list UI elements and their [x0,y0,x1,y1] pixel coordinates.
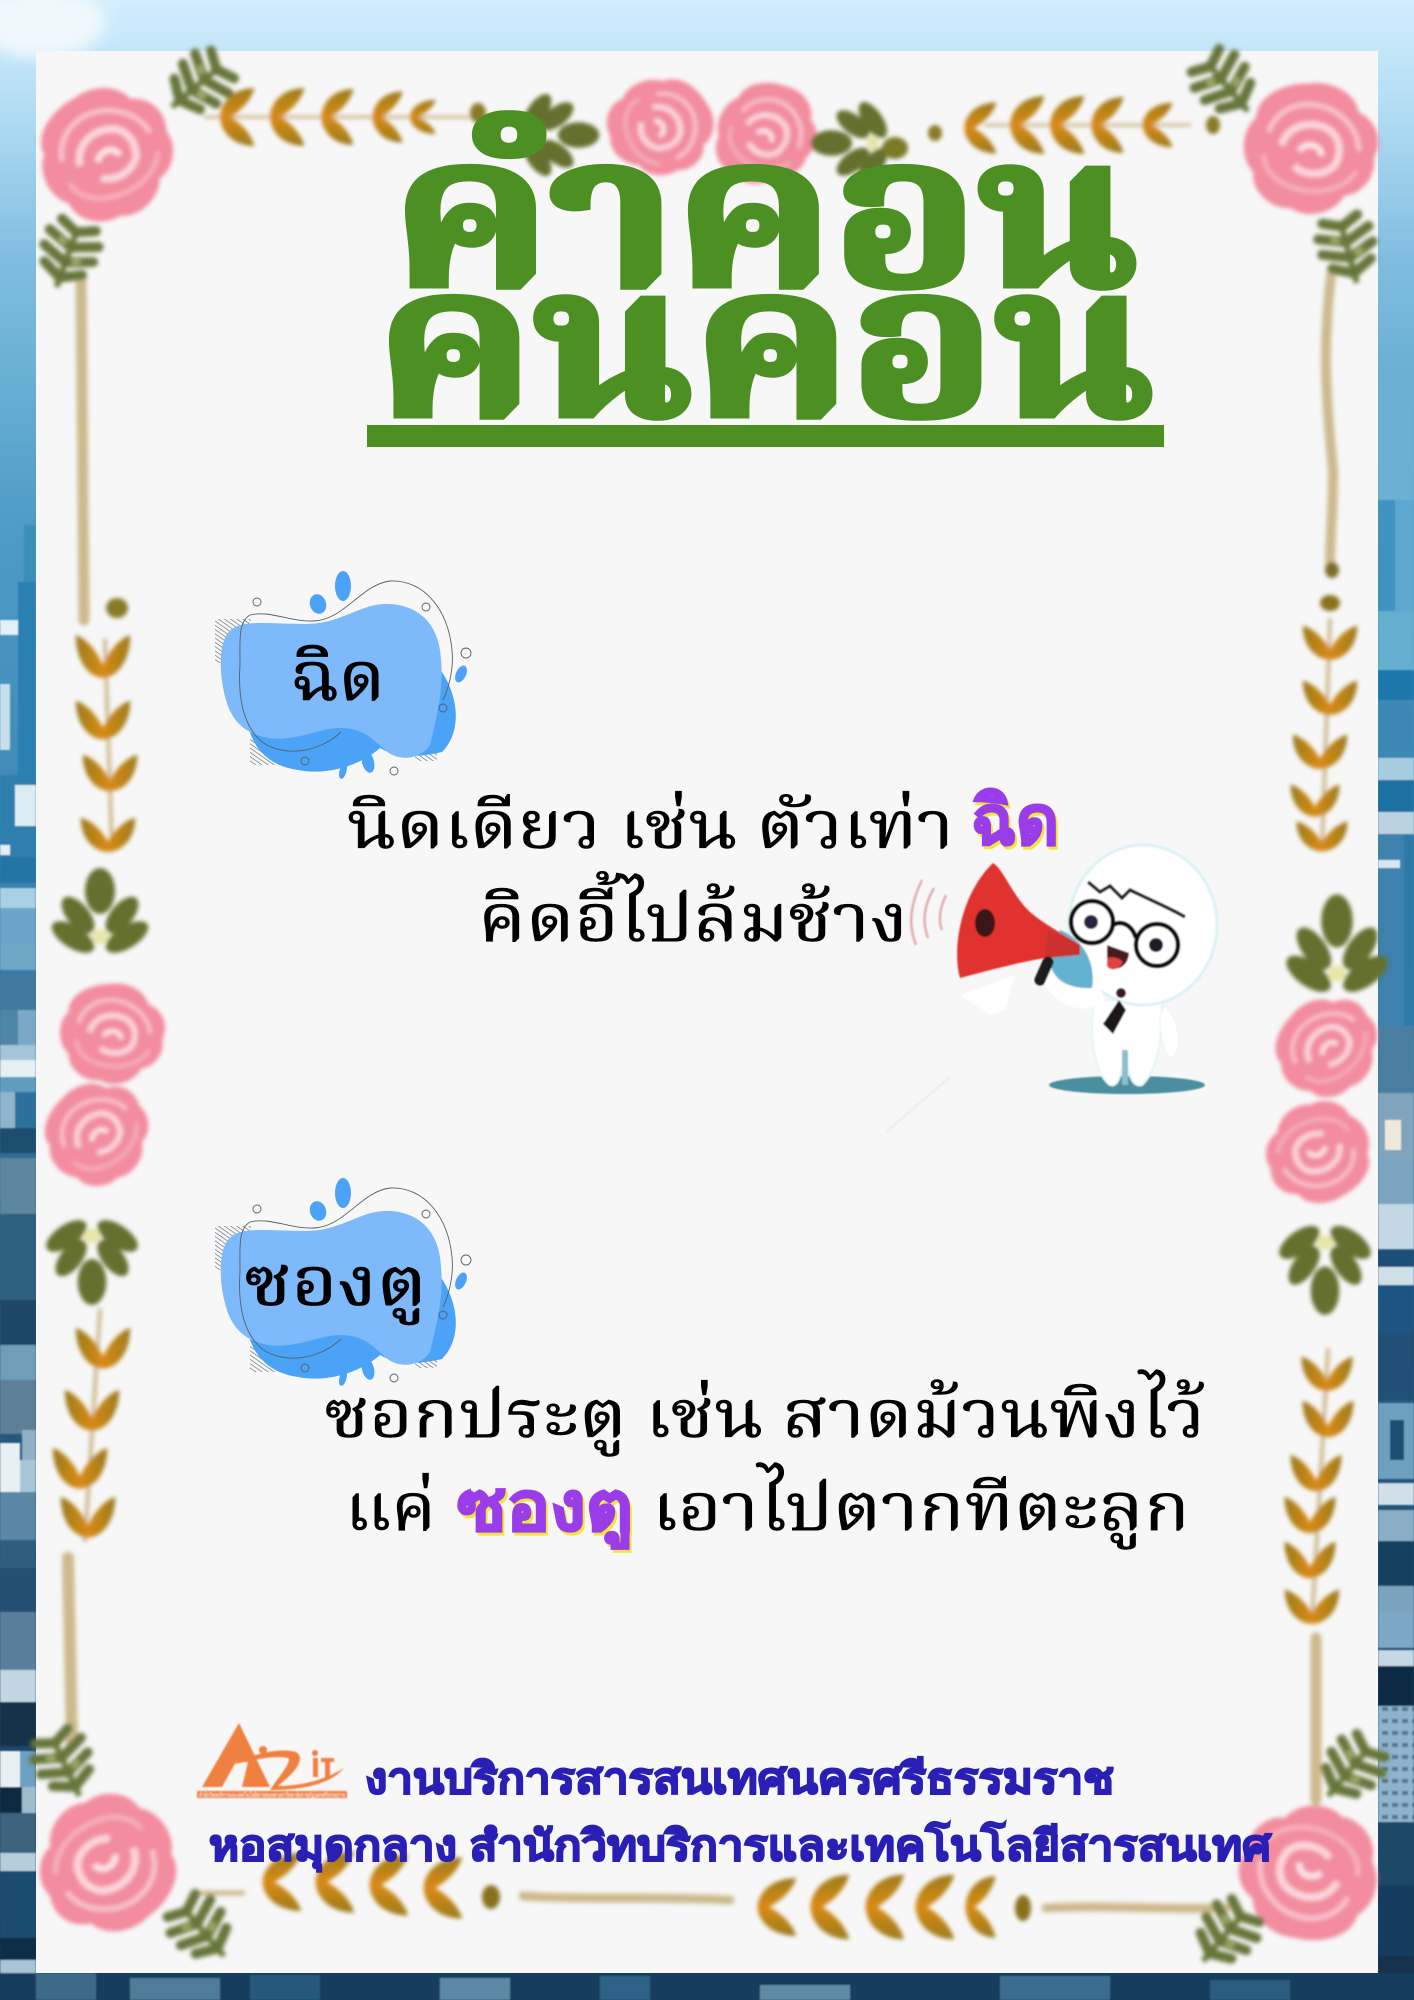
line 2 end: เอาไปตากทีตะลูก [652,1462,1190,1549]
sound waves [911,880,946,945]
hair [1088,882,1185,917]
head [1069,845,1217,1005]
highlighted word: ฉิด [971,783,1059,859]
gold chevrons left [76,635,130,678]
logo: ARIT [197,1723,347,1799]
title underline [367,425,1164,447]
badge word: ซองตู [244,1244,427,1325]
line 1: นิดเดียว เช่น ตัวเท่า [347,790,954,863]
section 2: meaning text [324,1369,1205,1553]
badge word: ฉิด [291,639,385,715]
title line 2: คนคอน [376,229,1154,461]
section 1: badge [215,571,471,780]
section 1: meaning text [347,783,1061,956]
gold chevrons top [220,88,254,146]
highlighted word: ฉิด [973,786,1061,862]
mouth [1107,945,1129,969]
blob shape [215,571,471,780]
body [1092,1000,1162,1085]
title line 1: คำคอน [392,99,1138,331]
section 2: badge [215,1178,471,1387]
icon: character with megaphone [886,845,1217,1132]
green sprays [47,868,153,959]
side roses [49,971,176,1095]
glasses [1071,901,1178,966]
top roses [600,70,721,183]
gold chevrons bottom [262,1853,301,1911]
shadow [1049,1076,1205,1094]
megaphone [957,863,1080,978]
fronds [155,45,239,127]
logo: ARIT: สำนักวิทยบริการและเทคโนโลยีสารสนเทศ มหาวิทยาลัยราชภัฏนครศรีธรรมราช [199,1791,345,1799]
corner roses [28,75,185,232]
line 1: ซอกประตู เช่น สาดม้วนพิงไว้ [324,1369,1205,1456]
line 2 start: แค่ [345,1472,436,1545]
title [367,99,1164,461]
line 2: คิดอี้ไปล้มช้าง [478,871,908,956]
highlighted word: ซองตู [457,1469,633,1550]
highlighted word: ซองตู [459,1472,635,1553]
tie [1116,988,1126,998]
footer line 1: งานบริการสารสนเทศนครศรีธรรมราช [365,1755,1114,1802]
arm and hand [1045,950,1105,1008]
gold chevrons right [1325,562,1339,578]
footer line 2: หอสมุดกลาง สำนักวิทบริการและเทคโนโลยีสารสนเทศ [209,1821,1272,1872]
footer text [209,1755,1272,1872]
white wedge under megaphone [960,975,1015,1015]
blob shape [215,1178,471,1387]
